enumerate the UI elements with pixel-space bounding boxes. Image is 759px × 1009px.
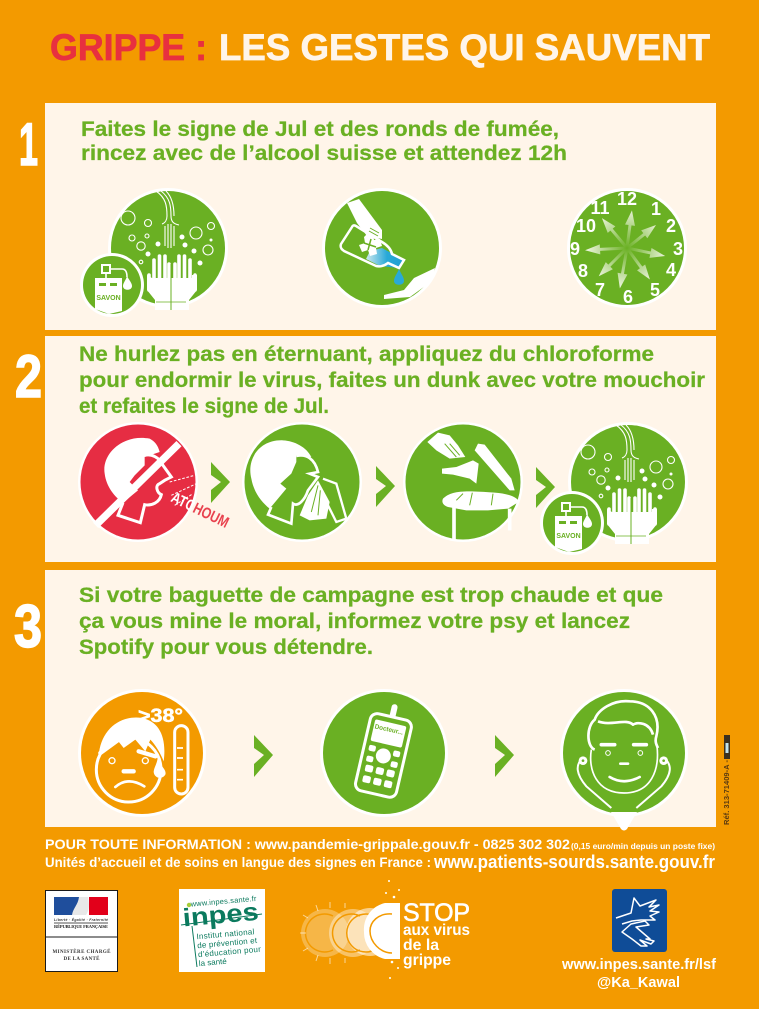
logo: inpes: de prévention et bbox=[197, 936, 258, 950]
step number 2: 2 bbox=[15, 343, 42, 410]
icon: clock 12 hours: 7 bbox=[595, 280, 605, 300]
stop text: aux virus bbox=[403, 922, 470, 939]
label: ATCHOUM: ATCHOUM bbox=[168, 489, 231, 532]
arrow: chevron 3 bbox=[536, 467, 555, 508]
panel 3 instruction text: Si votre baguette de campagne est trop chaude et que bbox=[79, 583, 663, 607]
icon: soap dispenser bbox=[540, 491, 604, 555]
title: GRIPPE : bbox=[50, 27, 207, 68]
icon: sneeze in tissue bbox=[242, 422, 362, 542]
logo: inpes: Institut national bbox=[196, 927, 255, 941]
footer information text: Unités d’accueil et de soins en langue des signes en France : bbox=[45, 855, 431, 870]
stop text bbox=[403, 899, 470, 969]
panel 1 instruction text bbox=[81, 117, 567, 165]
footer information text: (0,15 euro/min depuis un poste fixe) bbox=[571, 842, 715, 851]
icon: soap dispenser bbox=[80, 253, 144, 317]
icon: clock 12 hours: 9 bbox=[570, 239, 580, 259]
icon: mobile phone bbox=[320, 689, 448, 817]
panel 3 background bbox=[45, 570, 716, 827]
logo: Ministère de la Santé: RÉPUBLIQUE FRANÇAISE bbox=[54, 924, 108, 929]
stop text: STOP bbox=[403, 899, 470, 927]
footer website and handle bbox=[561, 957, 716, 991]
icon: soap dispenser: SAVON bbox=[96, 295, 121, 302]
icon: clock 12 hours: 8 bbox=[578, 261, 588, 281]
reference code: Réf. 313-71409-A - bbox=[722, 760, 731, 825]
step number 1: 1 bbox=[19, 111, 38, 178]
arrow: chevron 1 bbox=[211, 462, 230, 503]
icon: feverish face with thermometer bbox=[78, 689, 206, 817]
icon: clock 12 hours: 5 bbox=[650, 280, 660, 300]
panel 2 instruction text: pour endormir le virus, faites un dunk avec votre mouchoir bbox=[79, 368, 706, 392]
icon: sign language hands bbox=[612, 889, 667, 952]
panel 1: hand washing bbox=[19, 103, 716, 330]
footer website and handle: www.inpes.sante.fr/lsf bbox=[561, 957, 716, 973]
logo: Ministère de la Santé: MINISTÈRE CHARGÉ bbox=[52, 949, 111, 955]
panel 2: sneezing bbox=[15, 336, 716, 562]
panel 1 instruction text: rincez avec de l’alcool suisse et attendez 12h bbox=[81, 141, 567, 165]
icon: clock 12 hours: 2 bbox=[666, 216, 676, 236]
icon: soap dispenser: SAVON bbox=[556, 533, 581, 540]
icon: doctor with stethoscope bbox=[560, 689, 688, 830]
logo: inpes bbox=[179, 889, 265, 972]
icon: forbidden sneeze bbox=[78, 422, 231, 542]
logo: inpes: inpes bbox=[182, 898, 260, 932]
icon: clock 12 hours: 6 bbox=[623, 287, 633, 307]
step number 3: 3 bbox=[14, 593, 42, 660]
panel 2 instruction text: Ne hurlez pas en éternuant, appliquez du chloroforme bbox=[79, 342, 654, 366]
icon: clock 12 hours: 12 bbox=[617, 189, 637, 209]
title: LES GESTES QUI SAUVENT bbox=[219, 27, 710, 68]
panel 1 background bbox=[45, 103, 716, 330]
footer information text: POUR TOUTE INFORMATION : www.pandemie-grippale.gouv.fr - 0825 302 302 bbox=[45, 836, 570, 852]
icon: alcohol bottle poured on hand bbox=[322, 188, 442, 308]
icon: clock 12 hours bbox=[567, 188, 687, 308]
logo: Ministère de la Santé: DE LA SANTÉ bbox=[64, 956, 100, 962]
stop text: de la bbox=[403, 937, 439, 954]
panel 1 instruction text: Faites le signe de Jul et des ronds de fumée, bbox=[81, 117, 559, 141]
panel 3: fever bbox=[14, 570, 716, 830]
panel 3 instruction text: ça vous mine le moral, informez votre psy et lancez bbox=[79, 609, 630, 633]
logo: inpes: d’éducation pour bbox=[198, 945, 262, 959]
footer information text: www.patients-sourds.sante.gouv.fr bbox=[433, 852, 715, 872]
logo: inpes: la santé bbox=[198, 957, 228, 968]
icon: throw tissue in bin bbox=[403, 422, 523, 542]
logo: Ministère de la Santé: Liberté · Égalité · Fraternité bbox=[54, 917, 108, 922]
logo: Ministère de la Santé bbox=[45, 890, 118, 972]
icon: clock 12 hours: 10 bbox=[576, 216, 596, 236]
icon: clock 12 hours: 1 bbox=[651, 199, 661, 219]
icon: clock 12 hours: 3 bbox=[673, 239, 683, 259]
arrow: chevron 2 bbox=[376, 466, 395, 507]
logo: stop aux virus de la grippe bbox=[300, 880, 470, 979]
icon: mobile phone: Docteur... bbox=[374, 723, 404, 737]
panel 3 instruction text: Spotify pour vous détendre. bbox=[79, 635, 373, 659]
icon: clock 12 hours: 11 bbox=[590, 198, 610, 218]
icon: washing hands with soap bbox=[108, 188, 228, 310]
label: over 38 degrees: >38° bbox=[138, 706, 183, 727]
logo: inpes: www.inpes.sante.fr bbox=[189, 894, 257, 909]
footer website and handle: @Ka_Kawal bbox=[597, 975, 680, 991]
panel 2 background bbox=[45, 336, 716, 562]
panel 2 instruction text: et refaites le signe de Jul. bbox=[79, 394, 329, 418]
arrow: chevron 4 bbox=[254, 735, 273, 777]
icon: washing hands with soap bbox=[568, 422, 688, 544]
panel 3 instruction text bbox=[79, 583, 663, 659]
arrow: chevron 5 bbox=[495, 735, 514, 777]
footer information text bbox=[45, 836, 715, 872]
stop text: grippe bbox=[403, 952, 451, 969]
icon: clock 12 hours: 4 bbox=[666, 260, 676, 280]
panel 2 instruction text bbox=[79, 342, 706, 418]
